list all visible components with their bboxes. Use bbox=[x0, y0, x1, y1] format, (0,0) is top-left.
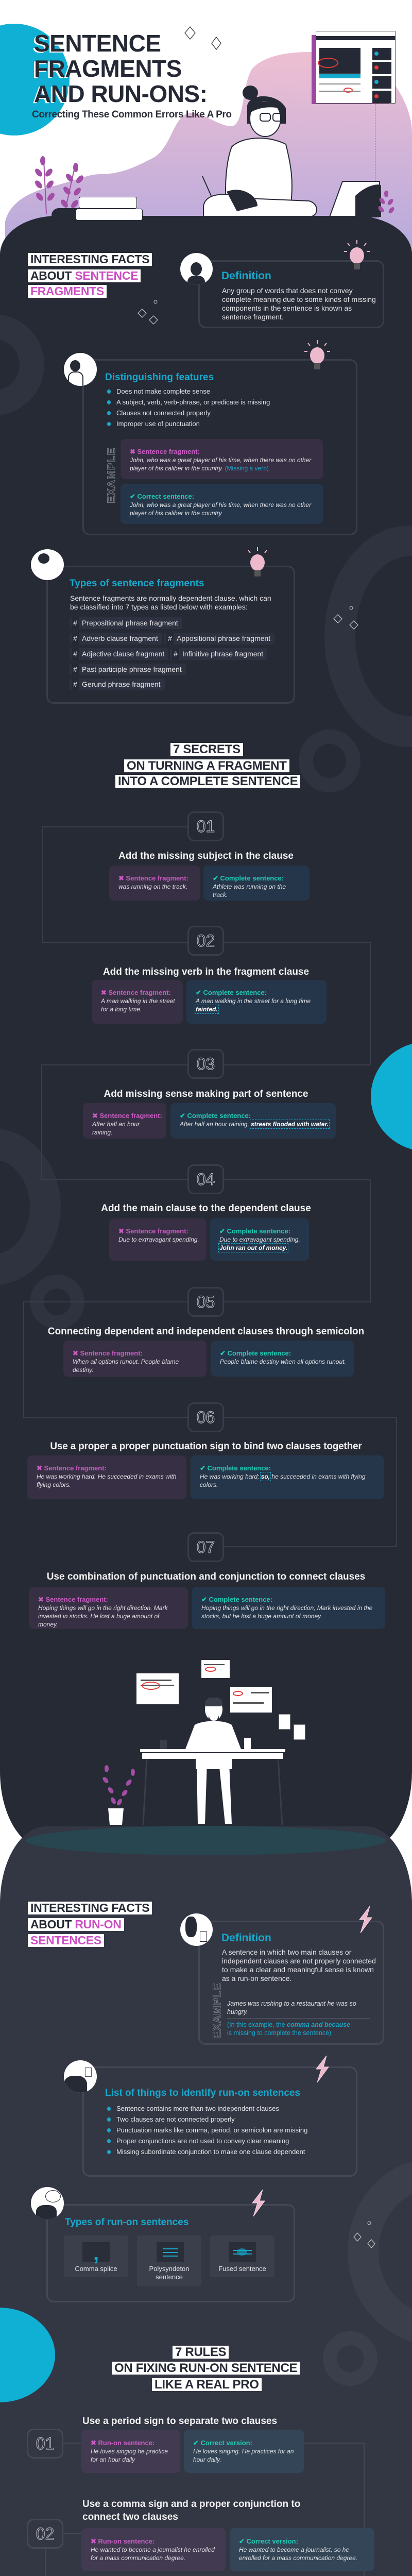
step 6 complete box: ✔ Complete sentence: bbox=[200, 1464, 271, 1472]
tile: polysyndeton bbox=[137, 2235, 201, 2286]
tile: comma splice bbox=[64, 2235, 128, 2277]
rule 01 bbox=[27, 2429, 63, 2459]
step 3 complete box: After half an hour raining, streets flooded with water. bbox=[180, 1121, 329, 1128]
step 02 bbox=[187, 926, 224, 956]
bullet list: Does not make complete sense bbox=[116, 387, 210, 395]
heading: 7 secrets: 7 SECRETS bbox=[173, 742, 241, 756]
connector lines section 2 bbox=[304, 2443, 365, 2444]
icon: lightning 1 bbox=[359, 1906, 372, 1933]
tags bbox=[70, 617, 274, 690]
example: correct: ✔ Correct sentence: bbox=[130, 493, 194, 500]
papers illustration bbox=[136, 1660, 305, 1740]
tags: Infinitive phrase fragment bbox=[182, 650, 263, 658]
step 1 fragment box: ✖ Sentence fragment: bbox=[118, 874, 188, 882]
step 4 complete box: Due to extravagant spending, John ran out of money. bbox=[219, 1236, 300, 1251]
tags: Adverb clause fragment bbox=[82, 634, 158, 642]
decorative rings section 1 bbox=[0, 314, 44, 415]
heading: 7 rules: LIKE A REAL PRO bbox=[154, 2378, 259, 2392]
rule 2 correct box: He wanted to become a journalist, so he enrolled for a mass communication degree. bbox=[239, 2546, 357, 2562]
step 7 heading: Use combination of punctuation and conjunction to connect clauses bbox=[47, 1571, 365, 1582]
step 07 bbox=[187, 1532, 224, 1562]
bullet list: Missing subordinate conjunction to make one clause dependent bbox=[116, 2148, 305, 2156]
step 2 heading: Add the missing verb in the fragment clause bbox=[103, 967, 309, 977]
definition card (fragments) bbox=[198, 260, 384, 328]
step 3 heading: Add missing sense making part of sentence bbox=[104, 1089, 308, 1099]
main title bbox=[33, 30, 207, 107]
hero cyan circle bbox=[0, 24, 70, 135]
tags: # bbox=[73, 680, 77, 688]
rule 2 run-on box: He wanted to become a journalist he enrolled for a mass communication degree. bbox=[91, 2546, 215, 2562]
man at desk illustration bbox=[103, 1698, 285, 1825]
rule 2 heading: connect two clauses bbox=[82, 2512, 178, 2522]
icon: lightning 2 bbox=[316, 2056, 329, 2082]
section 1 dark background bbox=[0, 216, 412, 1849]
example: fragment bbox=[121, 439, 323, 479]
section 2 background bbox=[0, 1826, 412, 2576]
bullet list: Two clauses are not connected properly bbox=[116, 2115, 235, 2123]
facts heading: sentence fragments bbox=[28, 252, 152, 298]
distinguishing features card bbox=[82, 359, 357, 535]
definition card (run-on) bbox=[198, 1921, 384, 2045]
step 1 complete box bbox=[203, 866, 310, 901]
facts heading: run-on bbox=[28, 1901, 152, 1947]
step 5 heading: Connecting dependent and independent clauses through semicolon bbox=[48, 1326, 364, 1337]
tile: polysyndeton: sentence bbox=[156, 2273, 183, 2281]
tags: Prepositional phrase fragment bbox=[82, 619, 178, 627]
step 5 complete box: People blame destiny when all options runout. bbox=[220, 1358, 346, 1365]
avatar: types bbox=[31, 549, 64, 580]
title: List of things to identify run-on sentences bbox=[105, 2088, 300, 2098]
example: correct bbox=[121, 484, 323, 524]
facts heading: run-on: SENTENCES bbox=[30, 1934, 101, 1947]
step 4 heading: Add the main clause to the dependent clause bbox=[101, 1203, 311, 1214]
step 01 bbox=[187, 811, 224, 841]
step 1 fragment box: was running on the track. bbox=[118, 883, 187, 890]
step 2 fragment box: A man walking in the street for a long time. bbox=[101, 997, 175, 1013]
rule 1 run-on box: He loves singing he practice for an hour daily bbox=[91, 2448, 168, 2463]
bullet list: A subject, verb, verb-phrase, or predicate is missing bbox=[116, 398, 270, 406]
icon: lightning 3 bbox=[252, 2190, 265, 2216]
step 6 heading: Use a proper a proper punctuation sign to bind two clauses together bbox=[50, 1441, 362, 1452]
step 7 fragment box: Hoping things will go in the right direction. Mark invested in stocks. He lost a huge amount of money. bbox=[38, 1604, 167, 1628]
tags: # bbox=[168, 634, 172, 642]
main title: SENTENCE bbox=[34, 30, 161, 57]
rule 2 correct box: ✔ Correct version: bbox=[239, 2537, 298, 2545]
heading: 7 rules: 7 RULES bbox=[175, 2345, 226, 2359]
icon: bulb 3 bbox=[248, 547, 267, 577]
step 2 fragment box bbox=[92, 980, 183, 1024]
rule 1 correct box bbox=[184, 2430, 304, 2473]
plants left bbox=[35, 156, 83, 214]
step 7 complete box: Hoping things will go in the right direction, Mark invested in the stocks, but he lost a huge amount of money. bbox=[201, 1604, 372, 1620]
rule 1 run-on box bbox=[81, 2430, 180, 2473]
tags: # bbox=[73, 634, 77, 642]
rule 2 heading bbox=[82, 2499, 300, 2522]
step 03 bbox=[187, 1049, 224, 1079]
decorative rings section 2 bbox=[348, 2159, 412, 2344]
tags: Past participle phrase fragment bbox=[82, 665, 182, 673]
rule 2 heading: Use a comma sign and a proper conjunction to bbox=[82, 2499, 300, 2510]
tags: # bbox=[73, 650, 77, 658]
definition text: A sentence in which two main clauses or independent clauses are not properly connected to make a clear and meaningful sense is known as a run-on sentence. bbox=[222, 1948, 376, 1982]
browser window illustration bbox=[312, 31, 396, 104]
step 3 complete box bbox=[170, 1103, 336, 1139]
step 4 complete box: ✔ Complete sentence: bbox=[219, 1227, 290, 1235]
tile: fused: Fused sentence bbox=[218, 2265, 266, 2273]
step 7 complete box: ✔ Complete sentence: bbox=[201, 1596, 272, 1603]
rule 1 run-on box: ✖ Run-on sentence: bbox=[91, 2439, 154, 2447]
heading: 7 secrets bbox=[115, 742, 300, 788]
rule 1 heading: Use a period sign to separate two clauses bbox=[82, 2416, 277, 2427]
bullet list: Improper use of punctuation bbox=[116, 420, 200, 428]
step 7 complete box bbox=[192, 1587, 385, 1629]
definition text: Any group of words that does not convey complete meaning due to some kinds of missing components in the sentence is known as sentence fragment. bbox=[222, 286, 376, 321]
connector lines section 1 bbox=[42, 826, 187, 827]
definition title: Definition bbox=[221, 270, 271, 282]
example bbox=[227, 2000, 370, 2037]
cyan circle left bbox=[0, 2308, 55, 2402]
tile: comma splice: Comma splice bbox=[75, 2265, 117, 2273]
step 6 complete box bbox=[191, 1455, 384, 1499]
tags: # bbox=[73, 619, 77, 627]
step 7 fragment box: ✖ Sentence fragment: bbox=[38, 1596, 108, 1603]
tile: comma splice: , bbox=[93, 2242, 99, 2265]
types of sentence fragments card bbox=[46, 566, 295, 704]
decorative diamonds bbox=[184, 26, 221, 50]
tags: Gerund phrase fragment bbox=[82, 680, 161, 688]
facts heading: run-on: INTERESTING FACTS bbox=[30, 1901, 149, 1914]
tags: Appositional phrase fragment bbox=[177, 634, 270, 642]
bullet list: Sentence contains more than two independent clauses bbox=[116, 2105, 279, 2112]
heading: 7 rules bbox=[112, 2345, 300, 2392]
bullet list bbox=[107, 387, 270, 428]
example: correct: John, who was a great player of his time, when there was no other player of his caliber in the country bbox=[130, 501, 311, 517]
step 6 fragment box: He was working hard. He succeeded in exams with flying colors. bbox=[37, 1473, 176, 1488]
teal floor bbox=[26, 1826, 386, 1855]
bullet list: Proper conjunctions are not used to convey clear meaning bbox=[116, 2137, 289, 2145]
step 1 complete box: Athlete was running on the track. bbox=[213, 883, 286, 899]
tags: Adjective clause fragment bbox=[82, 650, 164, 658]
subtitle: Correcting These Common Errors Like A Pro bbox=[32, 109, 232, 120]
title: Definition bbox=[221, 1932, 271, 1944]
avatar: distinguishing bbox=[64, 353, 97, 386]
step 1 complete box: ✔ Complete sentence: bbox=[213, 874, 284, 882]
plant right hero bbox=[378, 191, 394, 213]
step 3 fragment box bbox=[83, 1103, 166, 1139]
rule 2 run-on box: ✖ Run-on sentence: bbox=[91, 2537, 154, 2545]
example: is missing to complete the sentence) bbox=[227, 2029, 331, 2037]
rule 2 correct box bbox=[230, 2528, 374, 2571]
step 5 fragment box bbox=[63, 1341, 207, 1377]
example: fragment: John, who was a great player of his time, when there was no other player of his caliber in the country. (Missing a verb) bbox=[130, 456, 311, 472]
description: Sentence fragments are normally dependent clause, which can be classified into 7 types as listed below with examples: bbox=[70, 594, 271, 611]
bullet list: Clauses not connected properly bbox=[116, 409, 211, 417]
avatar: types run-on bbox=[31, 2187, 64, 2219]
facts heading: sentence fragments: INTERESTING FACTS bbox=[30, 252, 149, 266]
cyan circle right bbox=[371, 1042, 412, 1151]
example: fragment: ✖ Sentence fragment: bbox=[130, 448, 200, 455]
step 4 fragment box: Due to extravagant spending. bbox=[118, 1236, 199, 1243]
woman illustration bbox=[202, 86, 381, 217]
step 2 complete box: A man walking in the street for a long time fainted. bbox=[196, 997, 311, 1013]
example: James was rushing to a restaurant he was so hungry. bbox=[227, 2000, 356, 2015]
facts heading: sentence fragments: ABOUT SENTENCE bbox=[30, 269, 138, 282]
avatar: list bbox=[64, 2060, 97, 2093]
rule 1 correct box: ✔ Correct version: bbox=[193, 2439, 252, 2447]
step 4 complete box bbox=[210, 1218, 309, 1261]
books bbox=[52, 197, 143, 220]
rule 1 correct box: He loves singing. He practices for an hour daily. bbox=[193, 2448, 294, 2463]
title: Types of run-on sentences bbox=[65, 2217, 188, 2228]
step 2 fragment box: ✖ Sentence fragment: bbox=[101, 989, 171, 996]
tags: # bbox=[174, 650, 178, 658]
step 5 complete box bbox=[211, 1341, 354, 1377]
step 6 fragment box: ✖ Sentence fragment: bbox=[37, 1464, 107, 1472]
step 5 complete box: ✔ Complete sentence: bbox=[220, 1349, 291, 1357]
list of things card bbox=[82, 2066, 357, 2177]
main title: AND RUN-ONS: bbox=[34, 80, 207, 107]
step 4 fragment box bbox=[109, 1218, 207, 1261]
step 2 complete box bbox=[186, 980, 327, 1024]
step 6 complete box: He was working hard; so, he succeeded in exams with flying colors. bbox=[200, 1473, 366, 1488]
step 5 fragment box: When all options runout. People blame destiny. bbox=[73, 1358, 179, 1374]
step 05 bbox=[187, 1287, 224, 1317]
title: Distinguishing features bbox=[105, 372, 214, 383]
rule 2 run-on box bbox=[81, 2528, 226, 2571]
step 04 bbox=[187, 1164, 224, 1194]
tags: # bbox=[73, 665, 77, 673]
bullet list: Punctuation marks like comma, period, or semicolon are missing bbox=[116, 2126, 307, 2134]
hero pink blob background bbox=[5, 52, 412, 253]
facts heading: run-on: ABOUT RUN-ON bbox=[30, 1918, 122, 1931]
tile: fused bbox=[210, 2235, 274, 2277]
icon: bulb 2 bbox=[304, 340, 330, 369]
title: Types of sentence fragments bbox=[70, 578, 204, 589]
step 3 complete box: ✔ Complete sentence: bbox=[180, 1112, 251, 1120]
example: (In this example, the comma and because bbox=[227, 2021, 350, 2028]
step 1 heading: Add the missing subject in the clause bbox=[118, 851, 294, 861]
heading: 7 rules: ON FIXING RUN-ON SENTENCE bbox=[114, 2361, 297, 2375]
heading: 7 secrets: ON TURNING A FRAGMENT bbox=[127, 759, 287, 773]
step 5 fragment box: ✖ Sentence fragment: bbox=[73, 1349, 143, 1357]
bullet list bbox=[107, 2105, 307, 2156]
heading: 7 secrets: INTO A COMPLETE SENTENCE bbox=[118, 774, 298, 788]
step 1 fragment box bbox=[109, 866, 200, 901]
main title: FRAGMENTS bbox=[34, 55, 182, 82]
step 3 fragment box: After half an hour raining. bbox=[92, 1121, 140, 1136]
avatar: run-on def bbox=[180, 1913, 213, 1946]
avatar: definition bbox=[180, 253, 213, 285]
tile: polysyndeton: Polysyndeton bbox=[149, 2265, 190, 2273]
step 7 fragment box bbox=[29, 1587, 188, 1629]
types of run-on card bbox=[46, 2204, 295, 2302]
rule 02 bbox=[27, 2519, 63, 2549]
step 2 complete box: ✔ Complete sentence: bbox=[196, 989, 267, 996]
icon: bulb bbox=[344, 240, 370, 269]
facts heading: sentence fragments: FRAGMENTS bbox=[30, 284, 104, 298]
step 3 fragment box: ✖ Sentence fragment: bbox=[92, 1112, 162, 1120]
step 06 bbox=[187, 1402, 224, 1432]
step 4 fragment box: ✖ Sentence fragment: bbox=[118, 1227, 188, 1235]
step 6 fragment box bbox=[27, 1455, 186, 1499]
